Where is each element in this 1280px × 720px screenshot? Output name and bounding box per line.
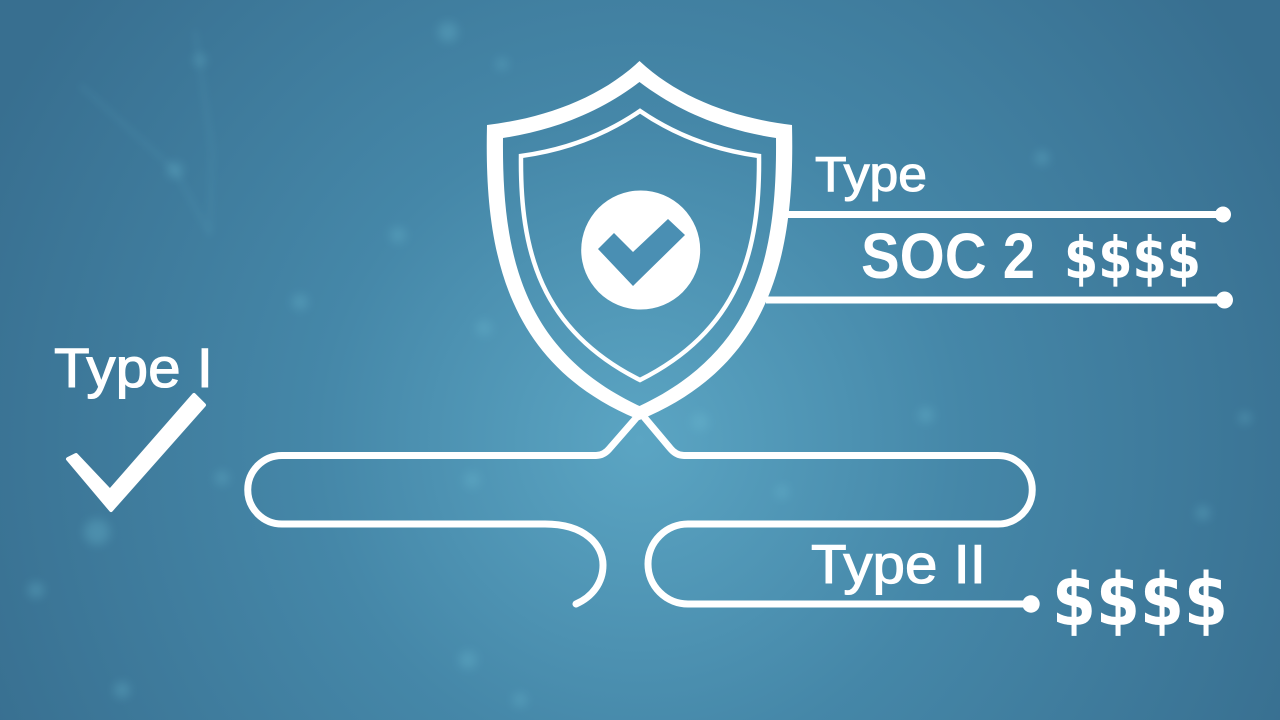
shield outer band <box>487 61 792 420</box>
label: Type II cost: $$$$ <box>1052 558 1228 643</box>
check badge <box>581 190 700 310</box>
check mark <box>598 219 685 286</box>
label: SOC 2 cost: $$$$ <box>1064 224 1201 292</box>
shield inner outline <box>521 111 759 380</box>
type II path <box>644 417 1040 613</box>
shield icon <box>487 61 792 420</box>
label: SOC 2: SOC 2 <box>861 220 1035 292</box>
icon: check mark <box>68 395 204 510</box>
connector lines: Type <box>766 206 1233 308</box>
network lines <box>80 30 212 235</box>
label: Type I: Type I <box>54 336 213 399</box>
label: Type: Type <box>815 148 927 202</box>
branching path <box>248 417 637 604</box>
label: Type II: Type II <box>811 533 986 595</box>
